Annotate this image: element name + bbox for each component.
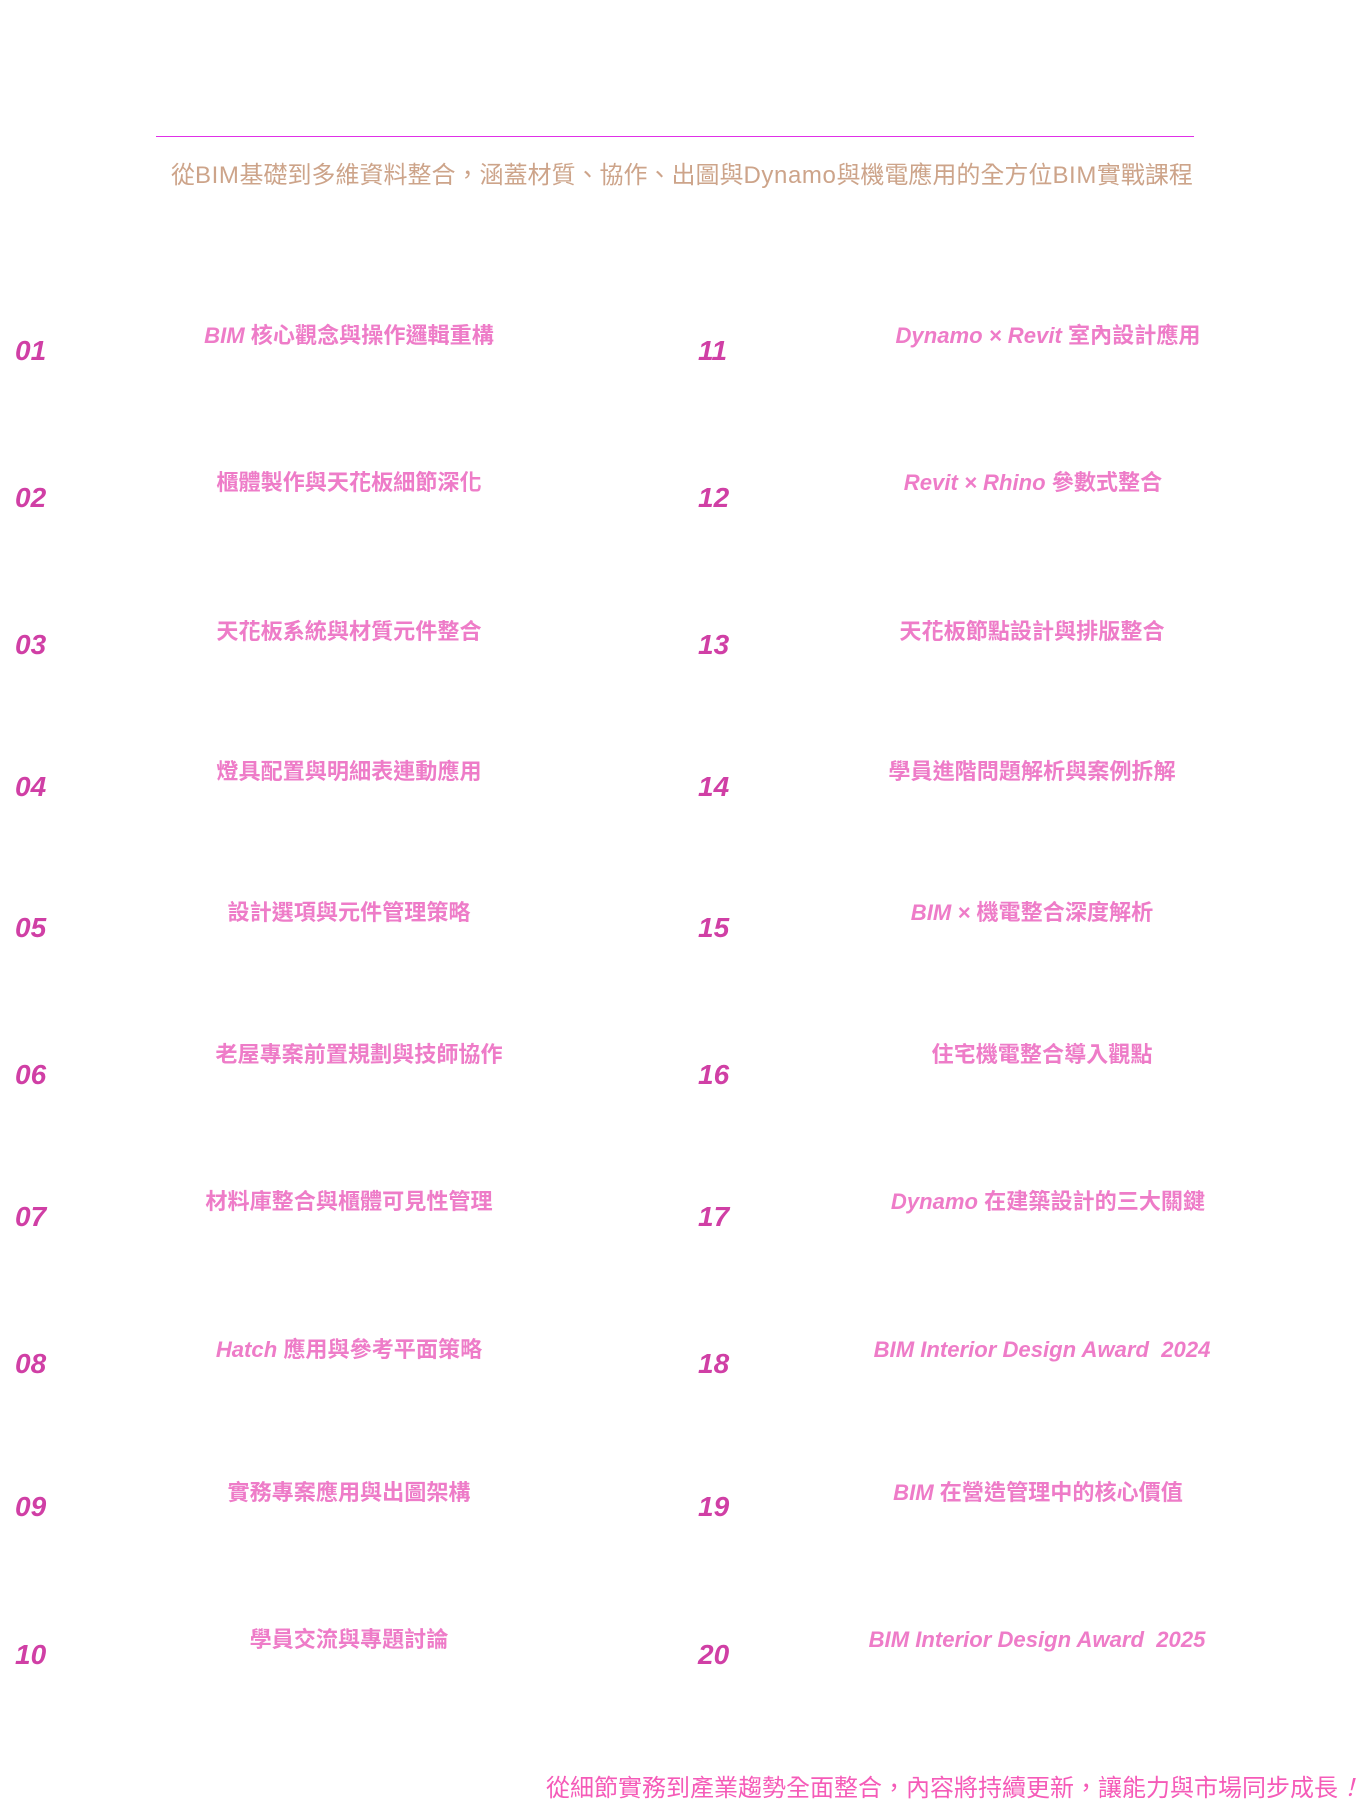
number 19: 19	[698, 1491, 729, 1522]
subtitle: 從BIM基礎到多維資料整合，涵蓋材質、協作、出圖與Dynamo與機電應用的全方位BIM實戰課程	[171, 162, 1193, 189]
number 12: 12	[698, 482, 729, 513]
number 04: 04	[15, 771, 46, 802]
number 20: 20	[698, 1639, 729, 1670]
course 15 title: BIM × 機電整合深度解析	[911, 900, 1153, 925]
course 18 title: BIM Interior Design Award 2024	[874, 1337, 1210, 1362]
course 09 title: 實務專案應用與出圖架構	[227, 1480, 471, 1505]
number 13: 13	[698, 629, 729, 660]
number 17: 17	[698, 1201, 729, 1232]
footer note: 從細節實務到產業趨勢全面整合，內容將持續更新，讓能力與市場同步成長！	[546, 1775, 1362, 1802]
number 18: 18	[698, 1348, 729, 1379]
course 16 title: 住宅機電整合導入觀點	[932, 1042, 1152, 1067]
course 05 title: 設計選項與元件管理策略	[227, 900, 471, 925]
course 04 title: 燈具配置與明細表連動應用	[216, 759, 482, 784]
course 12 title: Revit × Rhino 參數式整合	[904, 470, 1162, 495]
course 01 title: BIM 核心觀念與操作邏輯重構	[204, 323, 494, 348]
number 15: 15	[698, 912, 729, 943]
number 05: 05	[15, 912, 46, 943]
number 03: 03	[15, 629, 46, 660]
course 02 title: 櫃體製作與天花板細節深化	[216, 470, 482, 495]
number 09: 09	[15, 1491, 46, 1522]
number 16: 16	[698, 1059, 729, 1090]
course 06 title: 老屋專案前置規劃與技師協作	[215, 1042, 503, 1067]
course 14 title: 學員進階問題解析與案例拆解	[888, 759, 1176, 784]
number 11: 11	[698, 335, 727, 366]
number 07: 07	[15, 1201, 46, 1232]
course 11 title: Dynamo × Revit 室內設計應用	[895, 323, 1201, 348]
number 10: 10	[15, 1639, 46, 1670]
number 02: 02	[15, 482, 46, 513]
course 13 title: 天花板節點設計與排版整合	[899, 619, 1165, 644]
number 14: 14	[698, 771, 729, 802]
divider line	[156, 136, 1194, 137]
course 10 title: 學員交流與專題討論	[250, 1627, 448, 1652]
course 03 title: 天花板系統與材質元件整合	[216, 619, 482, 644]
course 19 title: BIM 在營造管理中的核心價值	[893, 1480, 1183, 1505]
number 01: 01	[15, 335, 46, 366]
course 07 title: 材料庫整合與櫃體可見性管理	[205, 1189, 493, 1214]
course 20 title: BIM Interior Design Award 2025	[869, 1627, 1205, 1652]
number 06: 06	[15, 1059, 46, 1090]
course 17 title: Dynamo 在建築設計的三大關鍵	[891, 1189, 1205, 1214]
course 08 title: Hatch 應用與參考平面策略	[216, 1337, 482, 1362]
number 08: 08	[15, 1348, 46, 1379]
